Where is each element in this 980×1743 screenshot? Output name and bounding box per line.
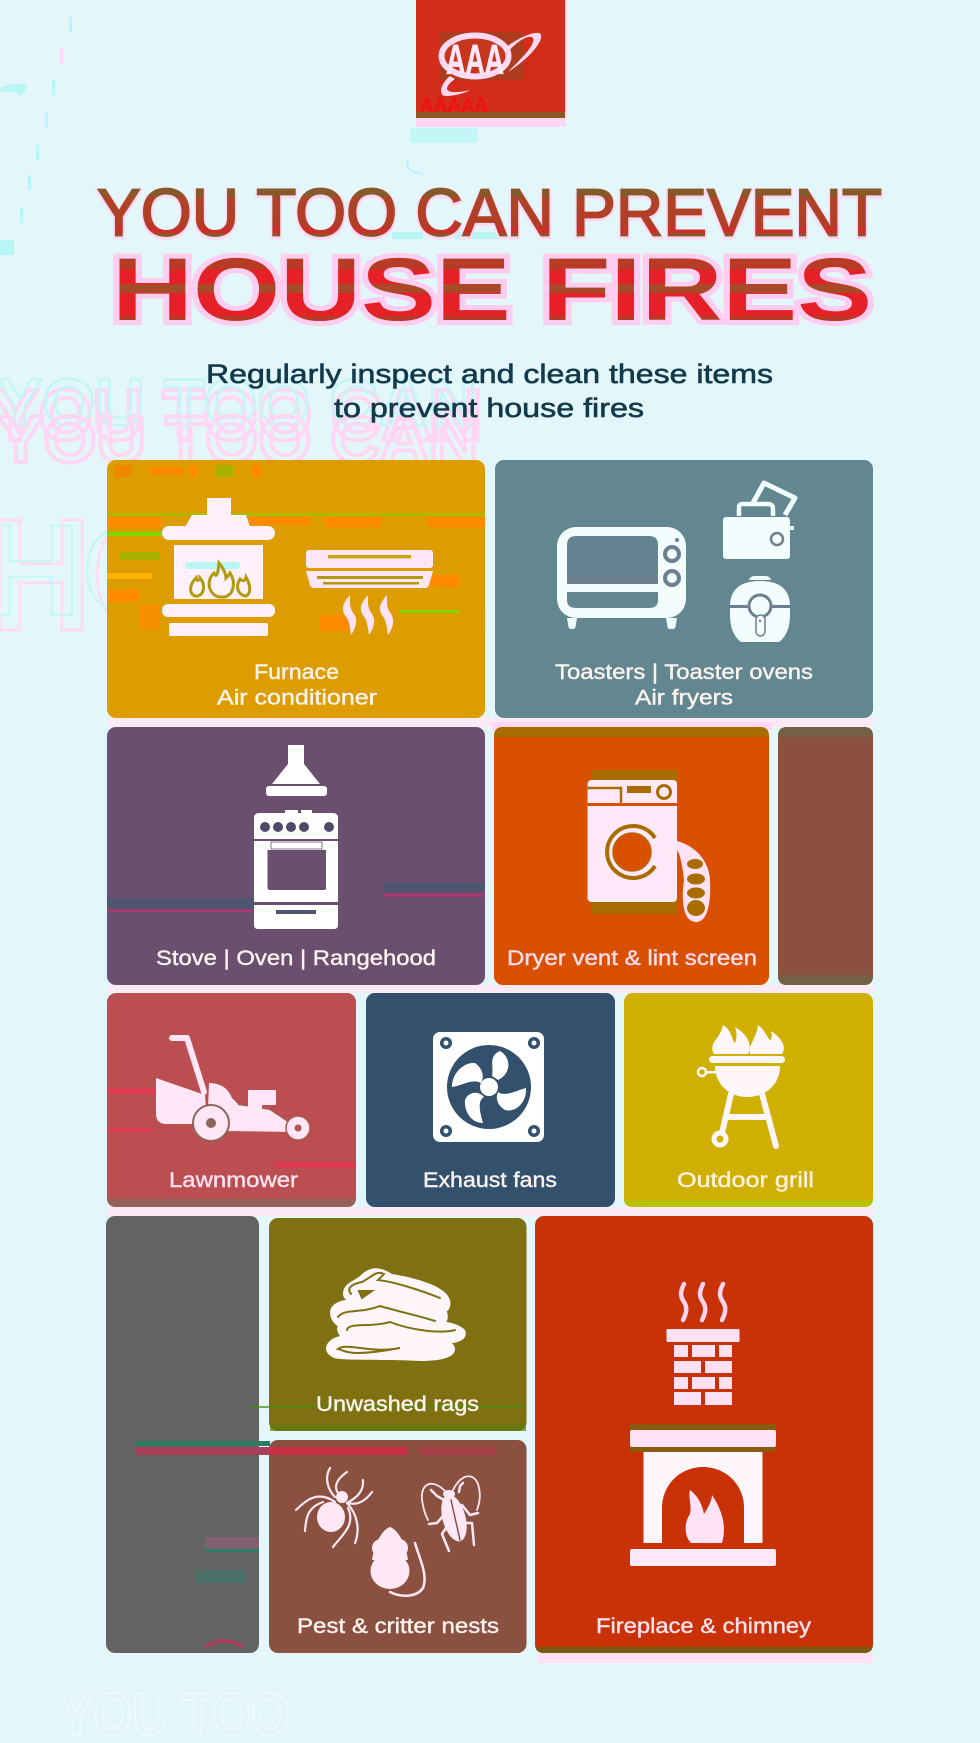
icon: smoke	[681, 1284, 725, 1320]
pink halos between panels	[107, 718, 873, 1216]
icon: toaster oven	[557, 527, 686, 629]
panel: unwashed rags	[250, 1218, 526, 1431]
icon: cockroach	[422, 1476, 480, 1551]
label: dryer vent and lint screen: Dryer vent & lint screen	[507, 947, 757, 970]
icon: spider	[296, 1468, 372, 1547]
panel: outdoor grill	[624, 993, 873, 1207]
icon: air fryer	[730, 576, 790, 642]
logo panel	[416, 0, 567, 127]
label: fireplace and chimney: Fireplace & chimney	[596, 1615, 812, 1638]
icon: air conditioner	[306, 550, 433, 635]
icon: stove	[254, 810, 338, 929]
icon: rags	[326, 1268, 466, 1361]
icon: rangehood	[266, 745, 327, 796]
icon: exhaust fan	[433, 1032, 544, 1142]
title line 1: YOU TOO CAN PREVENT	[97, 177, 882, 252]
logo panel: AAAAA	[420, 94, 488, 117]
title	[97, 176, 882, 339]
icon: lawnmower	[156, 1038, 310, 1141]
label: furnace: Furnace	[254, 661, 339, 684]
ghost artifact text: upper: YOU TOO CAN	[0, 365, 477, 439]
label: air conditioner: Air conditioner	[217, 686, 377, 710]
icon: fireplace	[630, 1424, 776, 1566]
subtitle	[206, 359, 773, 423]
subtitle: to prevent house fires	[334, 393, 644, 423]
label: outdoor grill: Outdoor grill	[677, 1169, 814, 1192]
glitch dashes near the top left	[0, 17, 500, 255]
icon: mouse	[370, 1527, 425, 1596]
ghost artifact text: lower: HOUSE	[0, 485, 490, 664]
panel: dryer vent and lint screen	[492, 722, 772, 985]
panel: exhaust fans	[366, 993, 615, 1207]
panel: pest and critter nests	[269, 1440, 526, 1653]
label: lawnmower: Lawnmower	[169, 1169, 298, 1192]
title line 2: HOUSE FIRES	[112, 239, 872, 339]
panel: empty brown	[778, 727, 873, 985]
ghost artifact text: upper: YOU TOO CAN	[0, 376, 482, 456]
icon: toaster	[723, 483, 795, 559]
ghost artifact text: upper: YOU TOO CAN	[0, 402, 478, 476]
panel: toasters, toaster ovens, air fryers	[495, 460, 873, 718]
subtitle: Regularly inspect and clean these items	[206, 359, 773, 389]
label: toasters and toaster ovens: Toasters | Toaster ovens	[555, 661, 813, 684]
label: unwashed rags: Unwashed rags	[316, 1393, 479, 1416]
logo panel: AAA	[446, 36, 504, 83]
label: pest and critter nests: Pest & critter nests	[297, 1615, 499, 1638]
glitch artifacts in panel	[107, 465, 485, 631]
icon: grill	[698, 1025, 785, 1148]
icon: furnace	[162, 498, 275, 636]
title line 1: YOU TOO CAN PREVENT	[97, 176, 882, 250]
icon: chimney	[666, 1329, 740, 1405]
panel: furnace and air conditioner	[107, 460, 485, 718]
title line 2: HOUSE FIRES	[112, 239, 872, 339]
label: exhaust fans: Exhaust fans	[423, 1169, 557, 1192]
label: stove, oven, rangehood: Stove | Oven | Rangehood	[156, 947, 436, 970]
panel: stove, oven, rangehood	[107, 727, 485, 985]
panel: empty gray	[106, 1216, 270, 1653]
icon: dryer	[588, 770, 710, 922]
panel: fireplace and chimney	[535, 1216, 873, 1663]
panel: lawnmower	[107, 993, 356, 1207]
label: air fryers: Air fryers	[635, 686, 733, 710]
